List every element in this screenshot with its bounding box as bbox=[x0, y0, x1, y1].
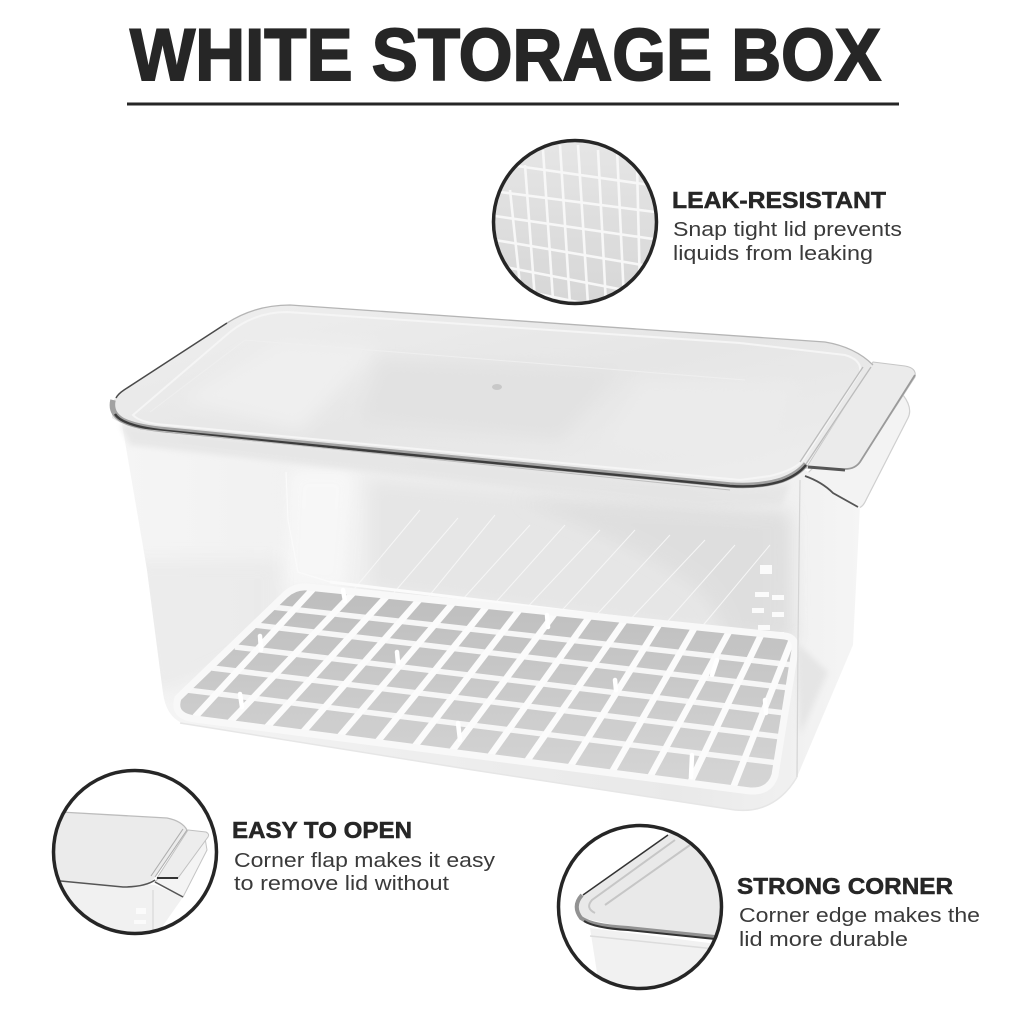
title: WHITE STORAGE BOX bbox=[130, 15, 881, 96]
lid top edge bbox=[227, 305, 873, 365]
tray long bars bbox=[195, 589, 793, 788]
back wall tints bbox=[147, 493, 796, 676]
text block: lid more durable bbox=[739, 929, 908, 951]
callout: easy to open bbox=[50, 765, 495, 940]
lid surface variations bbox=[180, 340, 800, 460]
text block bbox=[232, 817, 495, 895]
lid bbox=[112, 305, 873, 488]
text block: Snap tight lid prevents bbox=[673, 219, 902, 241]
box body bbox=[122, 424, 860, 810]
tray pegs bbox=[240, 590, 766, 777]
box handle scoop bbox=[805, 395, 910, 508]
text block: to remove lid without bbox=[234, 873, 450, 895]
lid front rim bbox=[112, 400, 806, 485]
lid right edge bbox=[800, 367, 871, 464]
text block: Corner flap makes it easy bbox=[234, 850, 495, 872]
text block bbox=[672, 187, 902, 265]
tray cross bars bbox=[187, 607, 793, 763]
icon: close-up of corner flap bbox=[55, 812, 210, 932]
lid inner edge bbox=[133, 312, 860, 480]
lid centre dimple bbox=[492, 384, 502, 390]
text block: STRONG CORNER bbox=[737, 873, 953, 899]
title underline bbox=[127, 102, 899, 106]
circle ring bbox=[558, 826, 722, 988]
text block bbox=[737, 873, 980, 951]
product photo: clear storage box with grid tray bbox=[112, 305, 915, 810]
text block: LEAK-RESISTANT bbox=[672, 187, 886, 213]
tray shadow edge bbox=[796, 642, 828, 735]
circle ring bbox=[494, 140, 656, 304]
front-right seam bbox=[797, 480, 800, 777]
box bottom edge bbox=[180, 723, 797, 810]
right-side glare marks bbox=[752, 565, 784, 637]
text block: Corner edge makes the bbox=[739, 905, 980, 927]
back corner edge highlights bbox=[286, 472, 330, 582]
band under lid bbox=[120, 424, 790, 508]
callout: strong corner bbox=[555, 822, 980, 992]
circle ring bbox=[54, 770, 216, 934]
callout: leak-resistant bbox=[490, 138, 902, 315]
icon: close-up of lid corner bbox=[574, 833, 720, 986]
ghost grid lines on back wall bbox=[345, 510, 770, 635]
handle flap bbox=[806, 362, 915, 469]
lid upper-left dark edge bbox=[116, 323, 227, 398]
tray holes bbox=[177, 587, 795, 791]
white grid tray bbox=[177, 587, 795, 791]
tray frame bbox=[177, 587, 795, 791]
icon: close-up of tray grid bbox=[495, 142, 655, 302]
text block: EASY TO OPEN bbox=[232, 817, 412, 843]
text block: liquids from leaking bbox=[673, 243, 873, 265]
